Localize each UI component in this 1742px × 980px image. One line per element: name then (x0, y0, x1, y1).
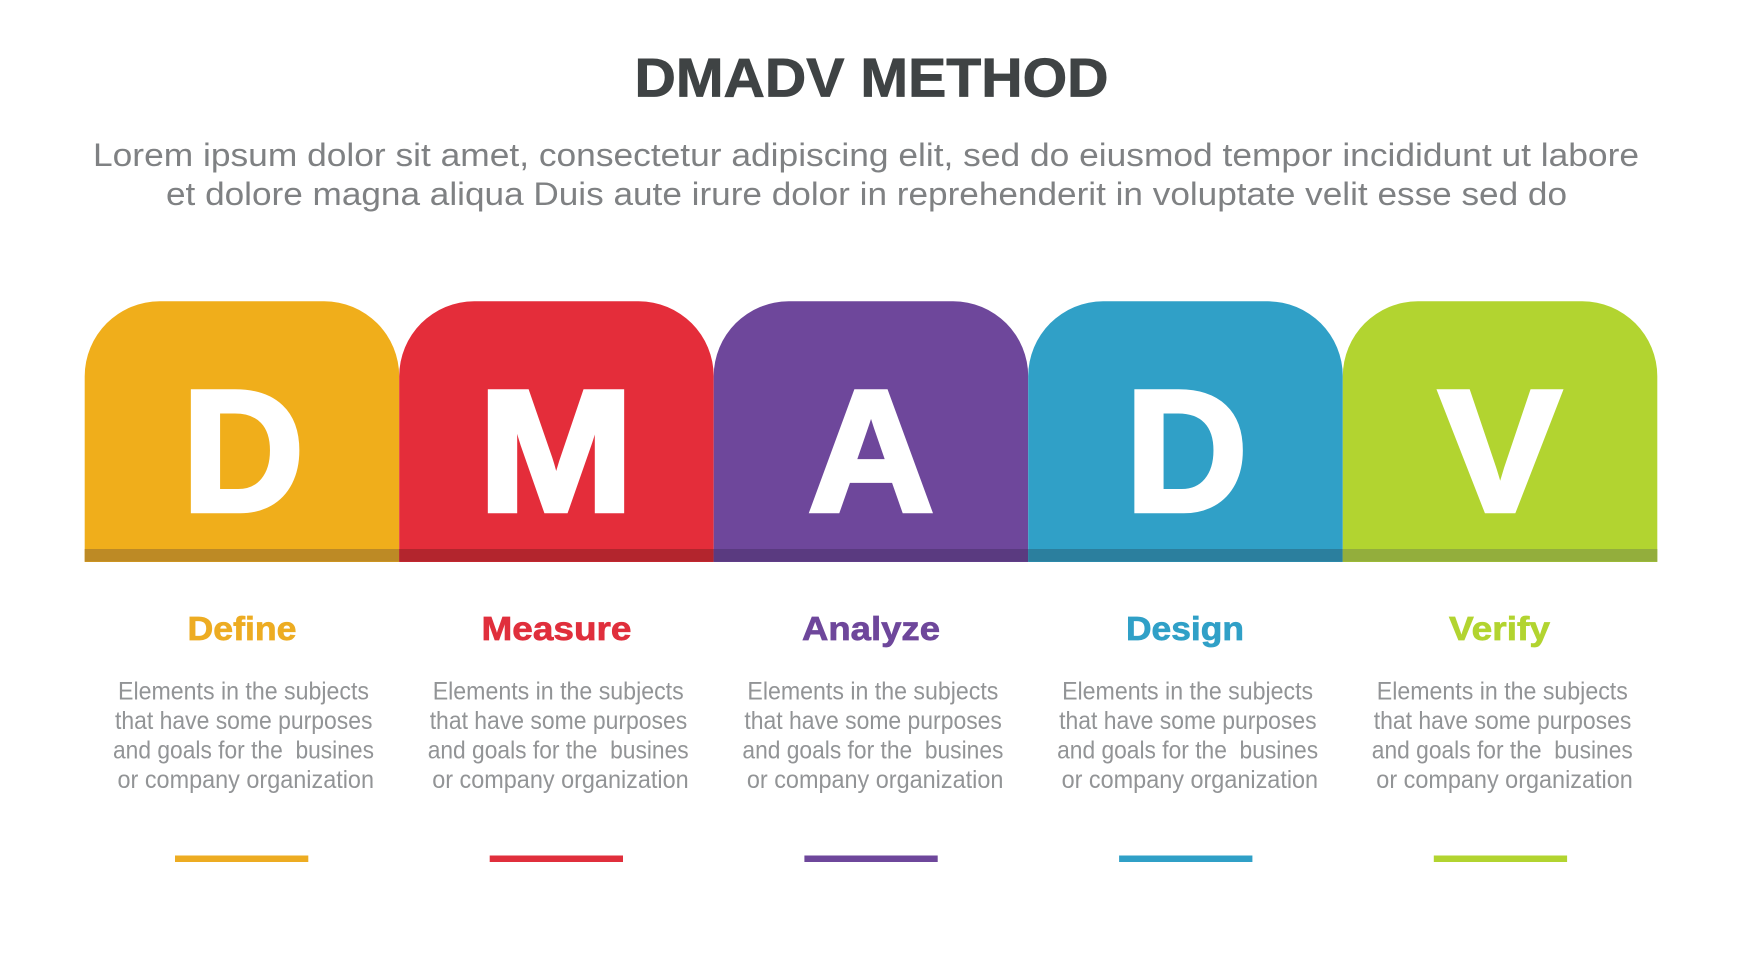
body text (742, 677, 1003, 794)
underline bar (1119, 856, 1252, 862)
panel: D block (85, 301, 399, 562)
body text: Elements in the subjects (1377, 677, 1628, 705)
subtitle text (93, 137, 1639, 212)
body text: or company organization (118, 766, 374, 794)
panel: Design column (1057, 610, 1318, 862)
body text: that have some purposes (115, 707, 372, 735)
body text: or company organization (747, 766, 1003, 794)
panel: Measure column (428, 610, 689, 862)
body text: and goals for the busines (1372, 736, 1633, 764)
body text: Elements in the subjects (118, 677, 369, 705)
subtitle text: Lorem ipsum dolor sit amet, consectetur adipiscing elit, sed do eiusmod tempor incididunt ut labore (93, 137, 1639, 173)
letter M: M (478, 354, 634, 548)
heading: Define: Define (188, 610, 296, 647)
body text: and goals for the busines (113, 736, 374, 764)
body text: that have some purposes (1374, 707, 1631, 735)
panel: D block 2 (1028, 301, 1343, 562)
body text: Elements in the subjects (433, 677, 684, 705)
body text: and goals for the busines (1057, 736, 1318, 764)
underline bar (175, 856, 308, 862)
heading: Verify: Verify (1449, 610, 1551, 647)
underline bar (1434, 856, 1567, 862)
heading: Design: Design (1126, 610, 1244, 647)
title: DMADV METHOD (634, 47, 1108, 109)
heading: Analyze: Analyze (802, 610, 940, 647)
body text (113, 677, 374, 794)
body text: Elements in the subjects (747, 677, 998, 705)
body text: or company organization (432, 766, 689, 794)
panel: V block (1343, 301, 1657, 562)
body text: or company organization (1376, 766, 1633, 794)
body text (1372, 677, 1633, 794)
underline bar (490, 856, 623, 862)
body text: that have some purposes (430, 707, 687, 735)
body text: and goals for the busines (428, 736, 689, 764)
body text: that have some purposes (744, 707, 1002, 735)
panel: Define column (113, 610, 374, 862)
letter A: A (808, 354, 934, 548)
body text (1057, 677, 1318, 794)
body text: or company organization (1062, 766, 1318, 794)
panel: Analyze column (742, 610, 1003, 862)
panel: Verify column (1372, 610, 1633, 862)
heading: Measure: Measure (482, 610, 632, 647)
panel: M block (399, 301, 714, 562)
body text: and goals for the busines (742, 736, 1003, 764)
subtitle text: et dolore magna aliqua Duis aute irure dolor in reprehenderit in voluptate velit esse sed do (166, 176, 1567, 212)
body text: that have some purposes (1059, 707, 1317, 735)
letter V: V (1439, 354, 1561, 548)
letter D: D (182, 354, 304, 548)
body text: Elements in the subjects (1062, 677, 1313, 705)
panel: A block (714, 301, 1028, 562)
letter D: D (1126, 354, 1248, 548)
body text (428, 677, 689, 794)
underline bar (804, 856, 938, 862)
